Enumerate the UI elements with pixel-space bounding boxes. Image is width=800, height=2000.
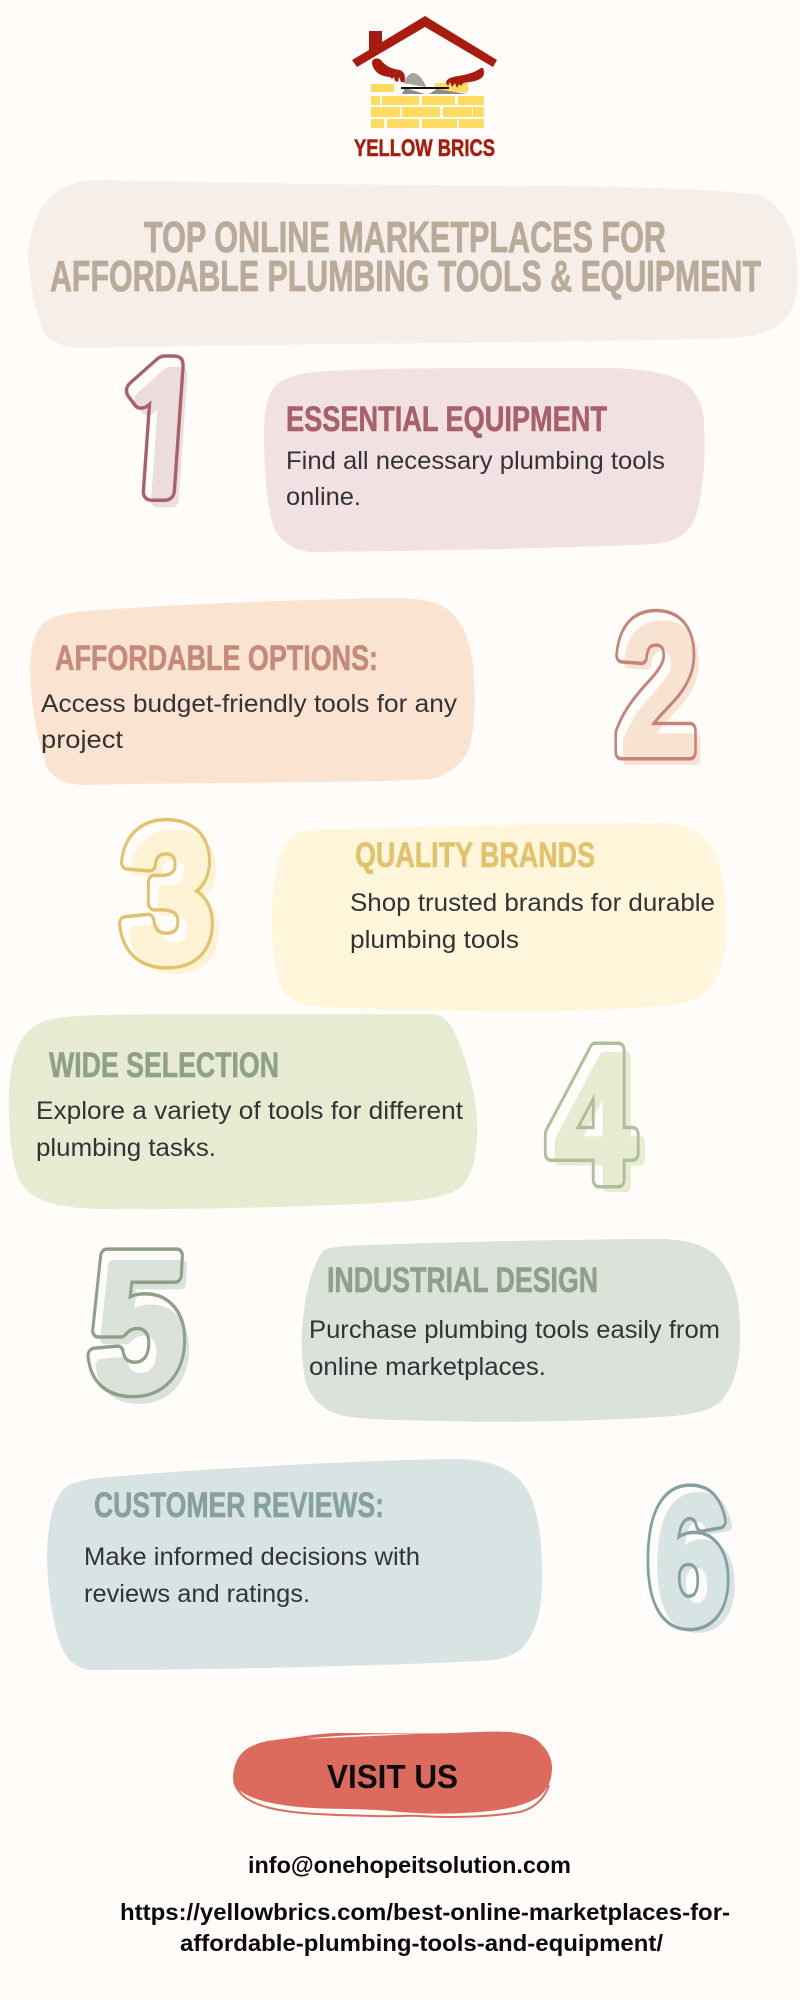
banner background [28,180,797,348]
heading: INDUSTRIAL DESIGN [327,1261,598,1300]
panel: quality brands [272,823,726,1012]
heading: AFFORDABLE OPTIONS: [55,639,378,678]
body text: Explore a variety of tools for different [36,1097,463,1125]
title [50,213,761,301]
contact email: info@onehopeitsolution.com [248,1852,571,1878]
body text: Find all necessary plumbing tools [286,447,665,475]
number 5: 5 [91,1224,196,1438]
website url: affordable-plumbing-tools-and-equipment/ [180,1930,664,1956]
icon: right arm [446,68,484,88]
body text [350,889,715,954]
number 5 [86,1247,189,1404]
body text: Purchase plumbing tools easily from [309,1316,720,1344]
logo: Yellow Brics [352,16,497,162]
icon: trowel and mortar [401,73,467,94]
body text [41,690,458,754]
body text: plumbing tasks. [36,1134,216,1162]
number 2 [614,608,700,765]
body text: Shop trusted brands for durable [350,889,715,917]
panel: industrial design [302,1239,740,1422]
body text: reviews and ratings. [84,1580,310,1608]
body text [84,1543,420,1608]
number 1 [124,354,188,508]
body text [36,1097,463,1162]
number 1: 1 [109,358,222,528]
body text [286,447,665,511]
body text: online marketplaces. [309,1353,546,1381]
website url: https://yellowbrics.com/best-online-marketplaces-for- [120,1899,730,1925]
button: visit us [233,1732,552,1817]
number 6 [646,1483,735,1633]
heading: WIDE SELECTION [49,1046,279,1085]
panel: wide selection [9,1014,477,1209]
icon: red roof with chimney [352,16,497,67]
number 4: 4 [556,1017,642,1228]
logo wordmark: YELLOW BRICS [354,135,495,162]
heading: CUSTOMER REVIEWS: [94,1486,384,1525]
icon: yellow brick wall [371,83,484,128]
body text: Access budget-friendly tools for any [41,690,458,718]
body text: online. [286,483,361,511]
body text: plumbing tools [350,926,519,954]
icon: left arm [372,58,405,82]
body text: project [41,726,123,754]
number 3 [118,818,219,974]
panel: essential equipment [264,368,705,552]
website url [120,1899,730,1956]
panel: customer reviews [47,1459,542,1670]
panel: affordable options [30,598,475,785]
number 3: 3 [130,795,220,1008]
body text: Make informed decisions with [84,1543,420,1571]
heading: QUALITY BRANDS [355,836,595,875]
panel: title banner [28,180,797,348]
button: visit us: VISIT US [327,1758,458,1795]
number 2: 2 [622,587,702,802]
number 6: 6 [656,1460,736,1666]
body text [309,1316,720,1381]
heading: ESSENTIAL EQUIPMENT [286,400,607,439]
number 4 [544,1042,645,1192]
